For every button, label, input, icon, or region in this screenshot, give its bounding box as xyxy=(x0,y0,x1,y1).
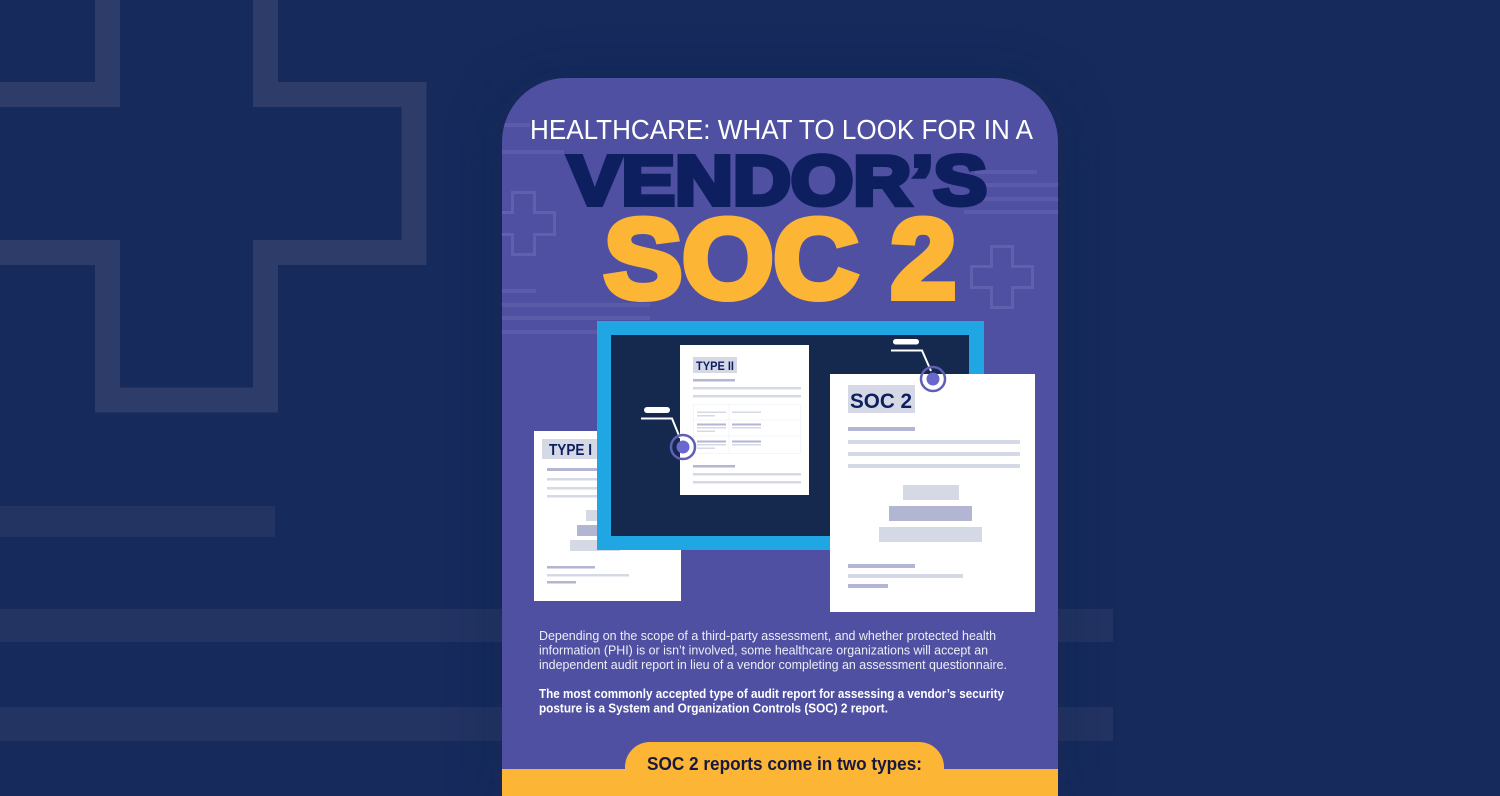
document: SOC 2 xyxy=(830,374,1035,612)
panel: main card xyxy=(502,78,1058,796)
section heading: SOC 2 reports come in two types: xyxy=(647,753,922,774)
text block: intro: information (PHI) is or isn’t involved, some healthcare organizations will accept an xyxy=(539,644,988,658)
text block: bold statement xyxy=(539,687,1004,716)
background bars xyxy=(0,506,1113,741)
text block: intro: Depending on the scope of a third-party assessment, and whether protected health xyxy=(539,629,996,643)
text block: bold statement: posture is a System and Organization Controls (SOC) 2 report. xyxy=(539,702,888,716)
heading: kicker: HEALTHCARE: WHAT TO LOOK FOR IN A xyxy=(530,114,1033,145)
text block: intro: independent audit report in lieu of a vendor completing an assessment questionnaire. xyxy=(539,658,1007,672)
heading: vendor's: VENDOR’S xyxy=(568,142,987,220)
monitor xyxy=(597,321,984,550)
card decoration xyxy=(498,123,1065,334)
label: Type I: TYPE I xyxy=(549,442,592,459)
heading: SOC 2: SOC 2 xyxy=(604,196,956,322)
yellow band xyxy=(502,742,1058,796)
background plus outline xyxy=(0,0,414,400)
callout: SOC 2 marker xyxy=(891,339,945,391)
card shadow xyxy=(494,78,1066,796)
callout: Type II marker xyxy=(641,407,695,459)
document: Type I xyxy=(534,431,681,601)
document: Type II xyxy=(680,345,809,495)
label: Type II: TYPE II xyxy=(696,361,734,373)
text block: intro xyxy=(539,629,1007,672)
label: SOC 2: SOC 2 xyxy=(850,389,912,413)
text block: bold statement: The most commonly accepted type of audit report for assessing a vendor’s security xyxy=(539,687,1004,701)
